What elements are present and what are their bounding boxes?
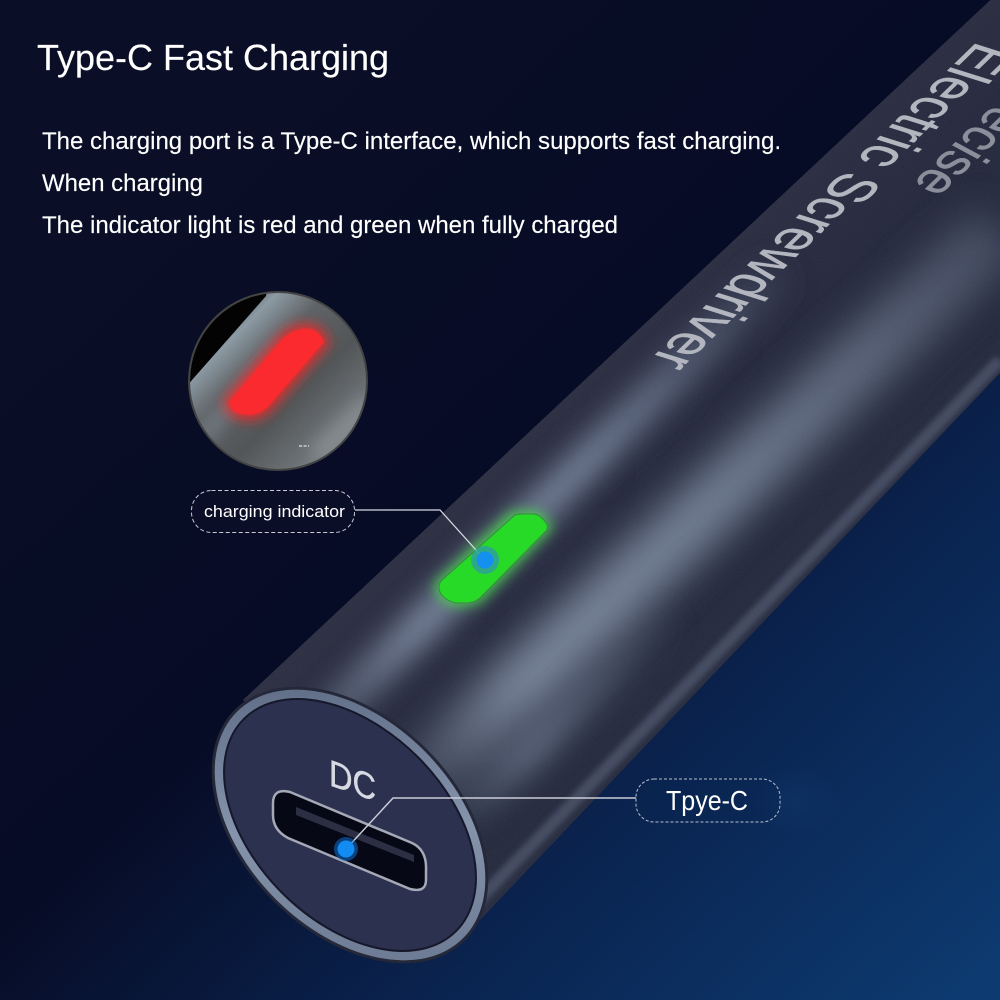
screwdriver body [200,0,1000,960]
Type-C port [273,791,426,890]
DC label: DC [329,753,376,810]
description text [42,128,781,239]
magnified red indicator [188,291,368,471]
cap face [176,651,524,999]
description text: The charging port is a Type-C interface, which supports fast charging. [42,128,781,155]
description text: The indicator light is red and green when fully charged [42,212,618,239]
callout: charging indicator [192,490,499,574]
end cap with DC port [158,633,542,1000]
callout: Type-C [334,779,780,861]
red light [230,330,323,414]
title: Type-C Fast Charging [37,37,389,78]
description text: When charging [42,170,203,197]
metal ring [163,638,537,1000]
green charging indicator [438,514,548,603]
callout: charging indicator: charging indicator [204,502,345,521]
red glow [230,330,323,414]
soft patch behind Type-C label [750,765,840,835]
callout: Type-C: Tpye-C [666,785,748,816]
black background corner [190,294,266,382]
